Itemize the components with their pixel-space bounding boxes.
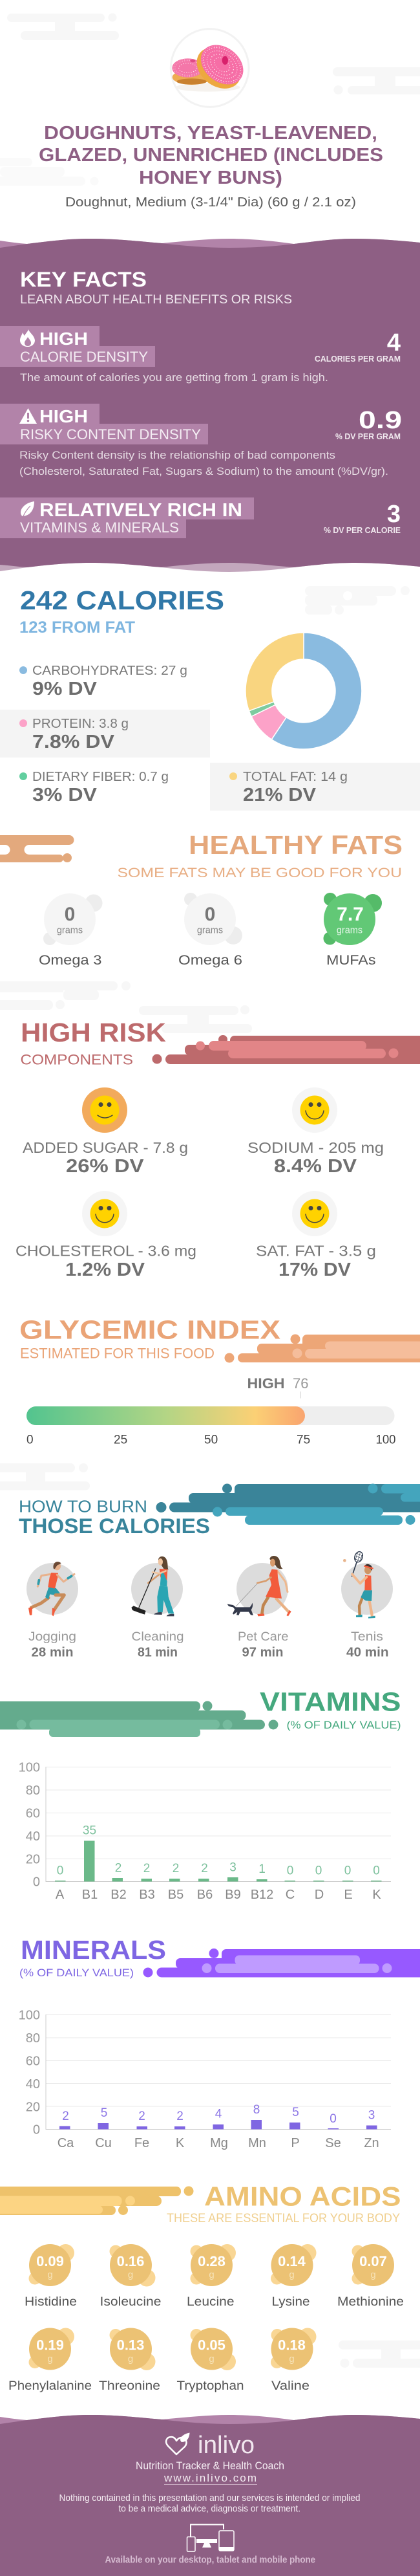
bar chart: vitamins xyxy=(19,1761,391,1902)
activity: pet care xyxy=(227,1556,291,1660)
fact: vitamins and minerals xyxy=(0,497,401,538)
subheading: components: COMPONENTS xyxy=(21,1052,133,1067)
heading: amino acids: AMINO ACIDS xyxy=(204,2181,401,2211)
fact: calorie density: The amount of calories you are getting from 1 gram is high. xyxy=(20,371,328,384)
gauge label: high 76: 76 xyxy=(293,1375,309,1392)
amino: lysine xyxy=(271,2244,317,2309)
bar chart: minerals: 60 xyxy=(26,2055,40,2069)
amino: histidine xyxy=(25,2244,77,2309)
amino: isoleucine: 0.16 xyxy=(117,2253,144,2269)
bar chart: minerals: 2 xyxy=(138,2110,145,2123)
stat: omega 3: Omega 3 xyxy=(39,953,102,968)
amino: phenylalanine: g xyxy=(47,2353,53,2364)
amino: lysine: Lysine xyxy=(271,2295,310,2309)
bar chart: vitamins: B12 xyxy=(251,1888,273,1902)
bar chart: minerals: 8 xyxy=(253,2103,260,2117)
heading: those calories: THOSE CALORIES xyxy=(19,1514,210,1538)
bar chart: vitamins: 35 xyxy=(83,1824,96,1837)
bar chart: vitamins: B3 xyxy=(139,1888,155,1902)
bar chart: minerals: 20 xyxy=(26,2100,40,2114)
panel: minerals xyxy=(19,1935,420,2150)
disclaimer: Nothing contained in this presentation and our services is intended or implied xyxy=(59,2493,361,2504)
gauge scale: 100 xyxy=(376,1434,395,1446)
bar chart: vitamins: B2 xyxy=(110,1888,127,1902)
title: HONEY BUNS) xyxy=(139,168,282,188)
bar chart: minerals: 4 xyxy=(215,2108,222,2121)
amino: leucine: g xyxy=(209,2269,215,2280)
gauge label: high 76 xyxy=(247,1375,309,1399)
bar chart: vitamins: B1 xyxy=(82,1888,98,1902)
stat: sodium: 8.4% DV xyxy=(274,1156,357,1177)
amino: methionine: g xyxy=(370,2269,376,2280)
bar chart: vitamins: D xyxy=(315,1888,324,1902)
legend: total fat: TOTAL FAT: 14 g xyxy=(243,770,348,784)
bar chart: vitamins: 2 xyxy=(201,1862,208,1875)
bar chart: vitamins: 2 xyxy=(143,1862,150,1875)
panel: amino acids xyxy=(0,2181,404,2393)
bar chart: minerals: Mg xyxy=(210,2136,228,2150)
activity: jogging xyxy=(26,1562,78,1660)
stat: omega 3 xyxy=(39,893,102,968)
fact: calorie density: 4 xyxy=(387,329,401,356)
bar chart: minerals: 40 xyxy=(26,2077,40,2091)
stat: saturated fat: 17% DV xyxy=(278,1260,352,1280)
bar chart: vitamins: 0 xyxy=(344,1864,351,1877)
fact: risky content density: RISKY CONTENT DENSITY xyxy=(20,426,201,442)
bar chart: minerals: Fe xyxy=(134,2136,149,2150)
logo: inlivo xyxy=(166,2432,255,2459)
activity: cleaning xyxy=(131,1556,184,1660)
legend: carbohydrates: CARBOHYDRATES: 27 g xyxy=(32,664,187,678)
bar chart: vitamins: 3 xyxy=(229,1861,236,1875)
bar chart: minerals: K xyxy=(176,2136,185,2150)
stat: mufas xyxy=(323,893,382,968)
amino: methionine: 0.07 xyxy=(359,2253,387,2269)
gauge scale xyxy=(26,1434,395,1446)
bar chart: vitamins: 0 xyxy=(33,1875,40,1889)
legend: total fat: 21% DV xyxy=(243,785,317,805)
fact: vitamins and minerals: RELATIVELY RICH IN xyxy=(39,500,242,521)
bar chart: vitamins: B9 xyxy=(225,1888,241,1902)
activity: cleaning: 81 min xyxy=(138,1646,178,1660)
bar chart: minerals: 2 xyxy=(62,2110,69,2123)
donut chart xyxy=(246,633,362,749)
bar chart: vitamins: 1 xyxy=(258,1862,266,1876)
stat: mufas: MUFAs xyxy=(326,953,376,968)
subheading: healthy fats: SOME FATS MAY BE GOOD FOR YOU xyxy=(118,866,402,880)
legend: protein: 7.8% DV xyxy=(32,732,115,752)
panel: how to burn calories xyxy=(19,1484,420,1660)
bar chart: vitamins: 20 xyxy=(26,1853,40,1867)
subheading: estimated: ESTIMATED FOR THIS FOOD xyxy=(20,1346,215,1361)
panel: footer xyxy=(0,2415,420,2576)
heading: glycemic index: GLYCEMIC INDEX xyxy=(19,1315,280,1344)
bar chart: minerals: Ca xyxy=(58,2136,74,2150)
gauge scale: 25 xyxy=(114,1434,127,1446)
heading: how to burn: HOW TO BURN xyxy=(19,1497,147,1516)
tagline: Nutrition Tracker & Health Coach xyxy=(136,2460,284,2472)
fact: vitamins and minerals: 3 xyxy=(387,501,401,528)
amino: threonine: Threonine xyxy=(99,2379,160,2393)
subheading: amino acids: THESE ARE ESSENTIAL FOR YOUR BODY xyxy=(167,2212,400,2225)
title: GLAZED, UNENRICHED (INCLUDES xyxy=(39,145,383,166)
bar chart: vitamins: 2 xyxy=(173,1862,179,1875)
bar chart: minerals: Zn xyxy=(364,2136,379,2150)
amino: tryptophan xyxy=(177,2328,244,2393)
activity: jogging: Jogging xyxy=(28,1630,76,1644)
fact: risky content density: HIGH xyxy=(39,406,88,426)
gauge scale: 75 xyxy=(297,1434,310,1446)
stat: saturated fat xyxy=(256,1191,376,1280)
disclaimer xyxy=(59,2493,361,2514)
fact: calorie density: CALORIES PER GRAM xyxy=(315,354,401,364)
stat: cholesterol xyxy=(16,1191,196,1280)
stat: omega 3: 0 xyxy=(65,904,75,925)
bar chart: vitamins: 2 xyxy=(115,1862,121,1875)
bar chart: vitamins: 0 xyxy=(373,1864,380,1877)
panel: high risk components xyxy=(16,1018,420,1280)
stat: added sugar: 26% DV xyxy=(66,1156,144,1177)
fact: risky content density xyxy=(0,404,402,477)
amino: threonine xyxy=(99,2328,160,2393)
bar chart: minerals: 0 xyxy=(330,2112,337,2126)
gauge bar xyxy=(26,1406,394,1425)
legend: protein xyxy=(0,710,210,758)
legend: dietary fiber: DIETARY FIBER: 0.7 g xyxy=(32,770,169,784)
bar chart: minerals: 5 xyxy=(292,2106,299,2119)
amino: isoleucine: Isoleucine xyxy=(100,2295,162,2309)
fact: calorie density xyxy=(0,326,401,384)
amino: isoleucine xyxy=(100,2244,162,2309)
bar chart: vitamins: B6 xyxy=(197,1888,213,1902)
activity: jogging: 28 min xyxy=(31,1646,74,1660)
amino: lysine: g xyxy=(289,2269,295,2280)
amino: threonine: 0.13 xyxy=(117,2337,144,2353)
stat: omega 3: grams xyxy=(57,925,83,935)
bar chart: vitamins: C xyxy=(286,1888,295,1902)
heading: minerals: MINERALS xyxy=(21,1935,166,1965)
legend: carbohydrates: 9% DV xyxy=(32,679,98,699)
amino: methionine: Methionine xyxy=(337,2295,404,2309)
legend: protein: PROTEIN: 3.8 g xyxy=(32,717,129,731)
heading: vitamins: VITAMINS xyxy=(260,1687,401,1717)
amino: valine xyxy=(271,2328,317,2393)
panel: key facts xyxy=(0,239,420,572)
stat: omega 6: Omega 6 xyxy=(178,953,242,968)
bar chart: vitamins: K xyxy=(372,1888,381,1902)
amino: histidine: g xyxy=(47,2269,53,2280)
panel: calories xyxy=(0,585,420,811)
stat: cholesterol: CHOLESTEROL - 3.6 mg xyxy=(16,1242,196,1259)
serving size subtitle: Doughnut, Medium (3-1/4" Dia) (60 g / 2.1 oz) xyxy=(65,195,356,210)
bar chart: minerals: 100 xyxy=(19,2008,40,2022)
amino: tryptophan: 0.05 xyxy=(198,2337,226,2353)
panel: healthy fats xyxy=(0,830,403,968)
bar chart: vitamins: 100 xyxy=(19,1761,40,1775)
bar chart: minerals: P xyxy=(291,2136,300,2150)
heading: calories: 242 CALORIES xyxy=(20,585,224,615)
amino: valine: 0.18 xyxy=(278,2337,306,2353)
amino: phenylalanine xyxy=(8,2328,92,2393)
bar chart: vitamins: 80 xyxy=(26,1784,40,1798)
logo: inlivo: inlivo xyxy=(198,2432,255,2459)
amino: lysine: 0.14 xyxy=(278,2253,306,2269)
fact: calorie density: HIGH xyxy=(39,329,88,349)
bar chart: minerals: Se xyxy=(325,2136,341,2150)
icon: doughnuts photo xyxy=(171,29,251,107)
activity: tennis xyxy=(341,1551,393,1660)
fact: vitamins and minerals: VITAMINS & MINERALS xyxy=(20,519,179,536)
amino: methionine xyxy=(337,2244,404,2309)
stat: mufas: 7.7 xyxy=(337,904,364,925)
availability note: Available on your desktop, tablet and mobile phone xyxy=(105,2554,315,2566)
stat: omega 6: grams xyxy=(197,925,223,935)
bar chart: vitamins: B5 xyxy=(168,1888,184,1902)
bar chart: vitamins: 40 xyxy=(26,1829,40,1844)
subheading: key facts: LEARN ABOUT HEALTH BENEFITS OR RISKS xyxy=(20,292,292,307)
bar chart: vitamins: 60 xyxy=(26,1806,40,1820)
amino: leucine xyxy=(187,2244,236,2309)
bar chart: minerals: 3 xyxy=(368,2109,375,2122)
fact: calorie density: CALORIE DENSITY xyxy=(20,349,148,365)
stat: sodium: SODIUM - 205 mg xyxy=(247,1139,384,1156)
bar chart: vitamins: A xyxy=(56,1888,65,1902)
bar chart: minerals xyxy=(19,2008,391,2150)
legend: dietary fiber xyxy=(19,770,169,805)
stat: omega 6: 0 xyxy=(205,904,215,925)
amino: tryptophan: g xyxy=(209,2353,215,2364)
bar chart: minerals: 0 xyxy=(33,2123,40,2137)
activity: pet care: 97 min xyxy=(242,1646,283,1660)
activity: tennis: 40 min xyxy=(346,1646,389,1660)
amino: valine: g xyxy=(289,2353,295,2364)
bar chart: vitamins: 0 xyxy=(315,1864,322,1877)
bar chart: minerals: 80 xyxy=(26,2031,40,2046)
disclaimer: to be a medical advice, diagnosis or treatment. xyxy=(119,2504,300,2514)
amino: histidine: Histidine xyxy=(25,2295,77,2309)
bar chart: vitamins: E xyxy=(344,1888,353,1902)
amino: tryptophan: Tryptophan xyxy=(177,2379,244,2393)
amino: phenylalanine: Phenylalanine xyxy=(8,2379,92,2393)
activity: cleaning: Cleaning xyxy=(132,1630,184,1644)
stat: added sugar: ADDED SUGAR - 7.8 g xyxy=(23,1139,188,1156)
heading: high risk: HIGH RISK xyxy=(21,1018,166,1047)
stat: mufas: grams xyxy=(337,925,362,935)
stat: saturated fat: SAT. FAT - 3.5 g xyxy=(256,1242,376,1259)
bar chart: minerals: Mn xyxy=(248,2136,266,2150)
bar chart: minerals: Cu xyxy=(95,2136,112,2150)
bar chart: minerals: 5 xyxy=(101,2106,107,2120)
gauge label: high 76: HIGH xyxy=(247,1375,284,1392)
bar chart: vitamins: 0 xyxy=(57,1864,63,1877)
activity: tennis: Tenis xyxy=(351,1630,383,1644)
fact: vitamins and minerals: % DV PER CALORIE xyxy=(324,525,401,535)
gauge scale: 50 xyxy=(204,1434,218,1446)
legend: carbohydrates xyxy=(19,664,187,699)
amino: valine: Valine xyxy=(271,2379,310,2393)
fact: risky content density: (Cholesterol, Saturated Fat, Sugars & Sodium) to the amount (%DV/gr). xyxy=(19,465,388,477)
amino: histidine: 0.09 xyxy=(36,2253,64,2269)
title: DOUGHNUTS, YEAST-LEAVENED, xyxy=(44,123,377,144)
legend: total fat xyxy=(210,763,420,811)
subheading: vitamins: (% OF DAILY VALUE) xyxy=(287,1719,401,1731)
stat: added sugar xyxy=(23,1087,188,1177)
stat: omega 6 xyxy=(178,893,242,968)
bar chart: vitamins: 0 xyxy=(287,1864,293,1877)
subheading: from fat: 123 FROM FAT xyxy=(19,618,135,637)
activity: pet care: Pet Care xyxy=(238,1630,288,1644)
gauge scale: 0 xyxy=(26,1434,34,1446)
legend: dietary fiber: 3% DV xyxy=(32,785,98,805)
amino: isoleucine: g xyxy=(128,2269,133,2280)
heading: key facts: KEY FACTS xyxy=(20,268,147,291)
icon: devices xyxy=(187,2524,234,2551)
subheading: minerals: (% OF DAILY VALUE) xyxy=(19,1967,134,1979)
stat: cholesterol: 1.2% DV xyxy=(65,1260,145,1280)
amino: threonine: g xyxy=(128,2353,133,2364)
stat: sodium xyxy=(247,1087,384,1177)
website link: www.inlivo.com xyxy=(163,2472,257,2484)
panel: vitamins xyxy=(0,1687,401,1902)
fact: risky content density: % DV PER GRAM xyxy=(335,431,401,441)
bar chart: minerals: 2 xyxy=(176,2110,184,2123)
fact: risky content density: 0.9 xyxy=(359,407,402,434)
panel: glycemic index xyxy=(19,1315,420,1446)
amino: leucine: 0.28 xyxy=(198,2253,226,2269)
fact: risky content density: Risky Content density is the relationship of bad components xyxy=(19,449,335,461)
amino: leucine: Leucine xyxy=(187,2295,234,2309)
amino: phenylalanine: 0.19 xyxy=(36,2337,64,2353)
heading: healthy fats: HEALTHY FATS xyxy=(189,830,403,860)
title xyxy=(39,123,383,188)
